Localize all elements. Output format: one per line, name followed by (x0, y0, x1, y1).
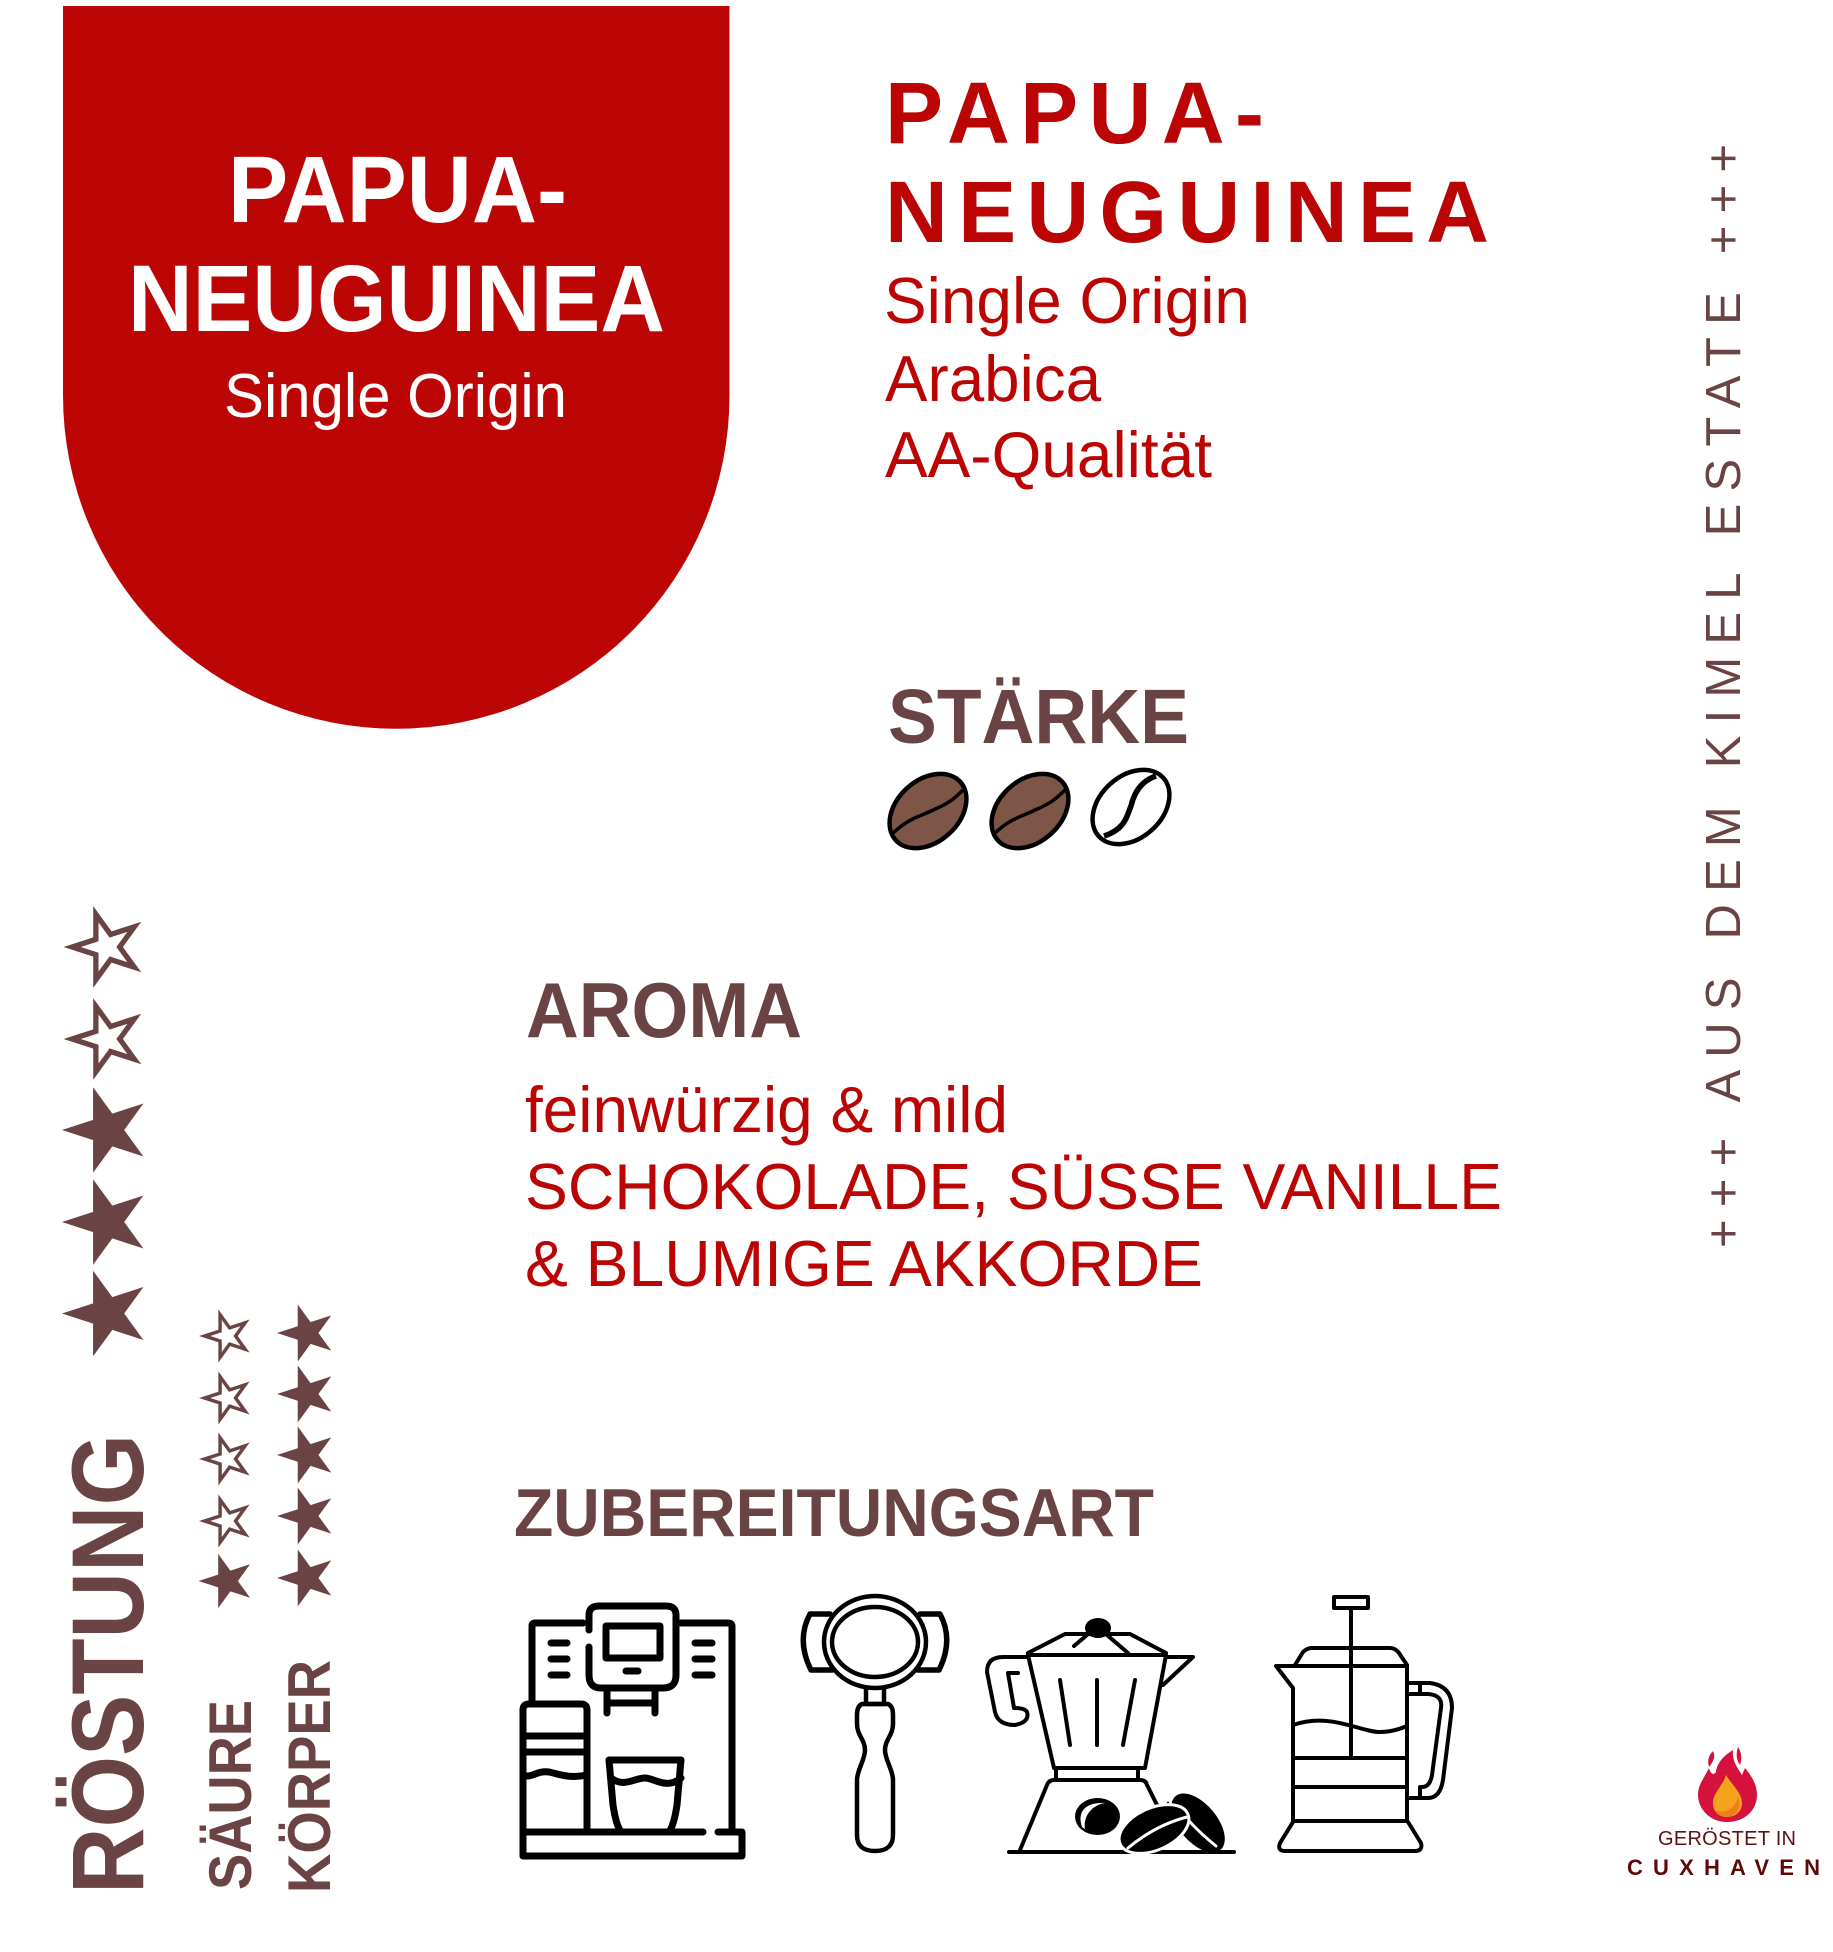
badge shape (63, 6, 730, 729)
badge title (128, 137, 665, 352)
icon: portafilter (803, 1596, 947, 1851)
icon: flame (1698, 1747, 1757, 1822)
icon: beans (1110, 1784, 1235, 1866)
vertical tagline: +++ AUS DEM KIMEL ESTATE +++ (1697, 144, 1751, 1248)
text block: origin details (884, 264, 1250, 491)
panel: red hero badge (63, 6, 730, 729)
text block: origin details: AA-Qualität (885, 418, 1212, 491)
stars: 5 of 5 filled (277, 1304, 331, 1607)
heading: preparation methods: ZUBEREITUNGSART (514, 1475, 1154, 1551)
text block: aroma description: SCHOKOLADE, SÜSSE VANILLE (525, 1150, 1502, 1223)
icon: empty bean (1078, 755, 1184, 859)
strength beans (875, 755, 1184, 863)
icon: filled bean (977, 759, 1083, 863)
badge title: PAPUA- (228, 137, 567, 243)
heading: coffee name: PAPUA- (885, 65, 1264, 162)
heading: coffee name: NEUGUINEA (885, 164, 1489, 261)
heading: coffee name (885, 65, 1489, 261)
stars: 3 of 5 filled (62, 906, 143, 1356)
icon: espresso machine (523, 1606, 742, 1856)
icon: filled bean (875, 759, 981, 863)
rating: Säure (197, 1309, 264, 1890)
stars: 1 of 5 filled (198, 1309, 250, 1608)
text block: aroma description: & BLUMIGE AKKORDE (525, 1227, 1203, 1300)
rating: Röstung (51, 906, 165, 1894)
text block: origin details: Single Origin (884, 264, 1250, 337)
label: Röstung: RÖSTUNG (51, 1434, 165, 1894)
icon: moka pot with beans (987, 1618, 1235, 1866)
heading: strength: STÄRKE (888, 674, 1189, 760)
text block: origin details: Arabica (885, 342, 1102, 415)
logo place name: CUXHAVEN (1627, 1855, 1820, 1880)
icon: french press (1276, 1597, 1452, 1851)
label: Säure: SÄURE (197, 1700, 264, 1890)
badge subtitle: Single Origin (224, 362, 567, 431)
text block: aroma description: feinwürzig & mild (525, 1073, 1008, 1146)
label: Körper: KÖRPER (276, 1660, 343, 1893)
rating: Körper (276, 1304, 343, 1893)
logo text: GERÖSTET IN (1658, 1828, 1796, 1850)
heading: aroma: AROMA (526, 966, 802, 1054)
logo: roasted in Cuxhaven (1627, 1747, 1820, 1880)
text block: aroma description (525, 1073, 1502, 1300)
badge title: NEUGUINEA (128, 246, 665, 352)
